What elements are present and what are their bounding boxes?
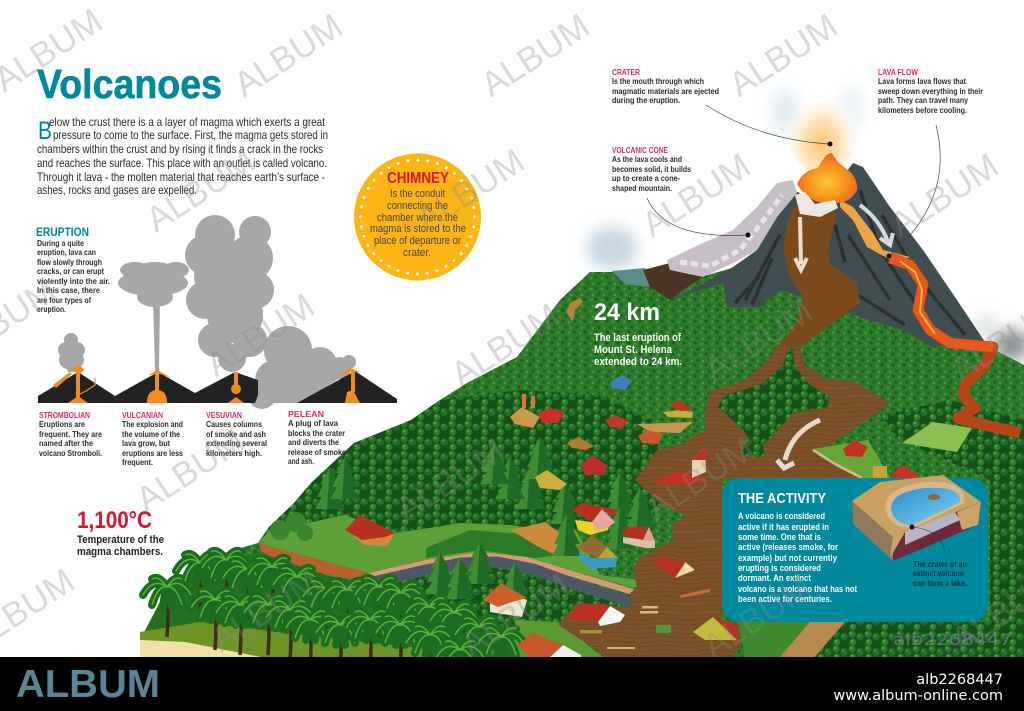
text block: introduction: [37, 115, 328, 197]
callout: chimney: Is the conduit: [390, 188, 445, 200]
panel text: volcano is a volcano that has not: [738, 584, 857, 594]
smoke: strombolian: [58, 333, 85, 372]
caption: extinct volcano: [913, 568, 964, 578]
footer logo: ALBUM: [16, 663, 160, 706]
text block: introduction: Through it lava - the molten material that reaches earth’s surface -: [37, 170, 325, 184]
label: volcanic cone: up to create a cone-: [612, 173, 680, 183]
label: lava flow: LAVA FLOW: [878, 67, 919, 77]
caption: can form a lake.: [913, 578, 967, 588]
village dirt path: [637, 422, 693, 433]
label: crater: [612, 67, 832, 146]
brown flow: [777, 207, 860, 347]
callout: chimney: chamber where the: [377, 212, 458, 224]
text block: vesuvian: [206, 410, 267, 458]
panel text: some time. One that is: [738, 532, 821, 542]
label: lava flow: path. They can travel many: [878, 95, 968, 105]
text block: vulcanian: The explosion and: [122, 419, 183, 429]
panel heading: THE ACTIVITY: [738, 490, 826, 507]
watermarks: ALBUM: [129, 421, 251, 520]
label: volcanic cone: becomes solid, it builds: [612, 164, 691, 174]
pale lava highlights: [680, 195, 782, 266]
yellow house by panel: [693, 617, 737, 640]
text block: vesuvian: extending several: [206, 438, 267, 448]
right forest: [810, 400, 1024, 657]
callout: temperature: Temperature of the: [77, 534, 164, 546]
white rim: [795, 192, 838, 217]
callout: 24 km: extended to 24 km.: [594, 356, 682, 368]
text block: pelean: [288, 409, 346, 466]
eroded bank: [258, 543, 370, 581]
watermarks: ALBUM: [697, 291, 819, 390]
chart: eruption types diagram: [38, 215, 397, 409]
flow arrows: [795, 217, 807, 270]
watermarks: ALBUM: [199, 286, 321, 385]
right bank edge: [813, 450, 862, 478]
label: volcanic cone: [612, 145, 750, 238]
yellow house: [572, 503, 618, 535]
callout: chimney: magma is stored to the: [370, 223, 466, 235]
cone ridges: [735, 190, 965, 335]
palm grove ground: [140, 552, 490, 657]
watermarks: ALBUM: [722, 6, 844, 105]
watermarks: ALBUM: [635, 146, 757, 245]
text block: strombolian: [39, 410, 102, 458]
label: crater: CRATER: [612, 67, 640, 77]
green lobe below panel: [738, 622, 810, 657]
lava conduits: [53, 365, 360, 403]
text block: vulcanian: frequent.: [122, 457, 153, 467]
panel text: A volcano is considered: [738, 511, 825, 521]
label: crater: during the eruption.: [612, 95, 680, 105]
callout: temperature: 1,100°C: [77, 507, 152, 534]
text block: eruption: [36, 225, 110, 314]
watermarks: ALBUM: [639, 429, 761, 528]
callout: 24 km: [594, 299, 682, 368]
text block: pelean: blocks the crater: [288, 428, 346, 438]
label: lava flow: [878, 67, 984, 258]
lagoon: [612, 268, 650, 287]
callout: 24 km: 24 km: [594, 299, 660, 326]
beach: [140, 640, 261, 657]
callout: temperature: magma chambers.: [77, 546, 163, 558]
caption: [913, 559, 967, 588]
text block: introduction: and reaches the surface. This place with an outlet is called volcano.: [37, 156, 327, 170]
caption: The crater of an: [913, 559, 967, 569]
label: volcanic cone: As the lava cools and: [612, 154, 682, 164]
text block: pelean: A plug of lava: [288, 418, 338, 428]
text block: eruption: ERUPTION: [36, 225, 89, 239]
label: volcanic cone: VOLCANIC CONE: [612, 145, 668, 155]
text block: eruption: In this case, there: [37, 285, 100, 295]
pale lava flow: [840, 200, 910, 263]
text block: pelean: and ash.: [288, 456, 314, 466]
text block: eruption: are four types of: [37, 295, 91, 305]
text block: introduction: chambers within the crust and by rising it finds a crack in the rocks: [37, 142, 323, 156]
text block: vesuvian: Causes columns: [206, 419, 262, 429]
text block: pelean: release of smoke: [288, 447, 346, 457]
text block: eruption: eruption, lava can: [37, 247, 96, 257]
callout: chimney: place of departure or: [374, 235, 461, 247]
callout: chimney: crater.: [403, 247, 431, 259]
text block: introduction: B: [38, 117, 52, 145]
forest island: [718, 345, 830, 458]
tree bunch: [270, 512, 313, 541]
text block: introduction: ashes, rocks and gases are expelled.: [37, 183, 197, 197]
text block: eruption: During a quite: [37, 238, 84, 248]
lower woods: [369, 567, 633, 657]
red lava stream: [890, 258, 1020, 433]
blue house: [577, 535, 618, 569]
watermarks: ALBUM: [454, 566, 576, 665]
forest hedge: [426, 530, 560, 558]
text block: strombolian: STROMBOLIAN: [39, 410, 90, 420]
text block: introduction: elow the crust there is a a layer of magma which exerts a great: [49, 115, 326, 129]
watermarks: ALBUM: [139, 141, 261, 240]
text block: vesuvian: kilometers high.: [206, 448, 262, 458]
illustration: houses: [345, 298, 920, 657]
dark cone: [670, 163, 985, 347]
callout: chimney: [354, 154, 481, 280]
panel text: erupting is considered: [738, 563, 821, 573]
mud debris: [580, 589, 710, 649]
watermarks: ALBUM: [204, 561, 326, 660]
base flow: [643, 263, 703, 300]
panel text: example) but not currently: [738, 553, 837, 563]
red white house: [568, 603, 625, 626]
grass by lower houses: [515, 620, 603, 657]
text block: vulcanian: eruptions are less: [122, 448, 183, 458]
text block: vulcanian: the volume of the: [122, 429, 180, 439]
smoke: vesuvian: [185, 215, 274, 372]
illustration: volcano: [643, 77, 1020, 433]
smoke: pelean: [248, 326, 356, 409]
olive undergrowth: [140, 622, 445, 657]
illustration: palm grove: [143, 551, 525, 700]
watermarks: ALBUM: [474, 6, 596, 105]
callout: 24 km: Mount St. Helena: [594, 344, 673, 356]
text block: vesuvian: VESUVIAN: [206, 410, 242, 420]
icon: crater lake block: [852, 475, 981, 561]
footer id: alb2268447: [916, 672, 1003, 688]
panel text: active (releases smoke, for: [738, 542, 838, 552]
pale lava field: [667, 180, 797, 277]
panel text: [738, 511, 857, 604]
text block: introduction: pressure to come to the surface. First, the magma gets stored in: [53, 128, 328, 142]
watermark id: alb2268447: [893, 630, 1012, 649]
bottom house: [517, 633, 581, 657]
callout: 24 km: The last eruption of: [594, 332, 681, 344]
text block: eruption: violently into the air.: [37, 276, 110, 286]
label: lava flow: kilometers before cooling.: [878, 105, 967, 115]
text block: vesuvian: of smoke and ash: [206, 429, 266, 439]
watermarks: ALBUM: [696, 568, 818, 667]
dirt path below panel: [780, 622, 845, 657]
light green field: [902, 422, 972, 452]
panel: the activity: [722, 475, 988, 622]
callout: chimney: connecting the: [387, 200, 448, 212]
smoke: vulcanian: [118, 262, 189, 372]
label: lava flow: Lava forms lava flows that: [878, 76, 966, 86]
text block: vulcanian: lava grow, but: [122, 438, 170, 448]
panel text: active if it has erupted in: [738, 522, 829, 532]
volcano silhouettes: [38, 371, 397, 403]
pink house: [622, 527, 655, 548]
house on mud: [653, 556, 695, 578]
label: volcanic cone: shaped mountain.: [612, 183, 672, 193]
big white flow arrow: [777, 420, 820, 468]
footer bar: [0, 657, 1024, 711]
orange house: [345, 515, 395, 546]
text block: strombolian: named after the: [39, 438, 93, 448]
text block: strombolian: frequent. They are: [39, 429, 102, 439]
watermarks: ALBUM: [227, 6, 349, 105]
illustration: mountain landscape: [140, 260, 1024, 657]
text block: vulcanian: [122, 410, 183, 467]
text block: eruption: eruption.: [37, 304, 66, 314]
strombolian branches: [78, 378, 95, 395]
illustration: trees: [315, 437, 655, 604]
dark forest band: [258, 390, 660, 543]
label: lava flow: sweep down everything in their: [878, 86, 984, 96]
label: crater: magmatic materials are ejected: [612, 86, 719, 96]
wrecked church: [653, 447, 708, 485]
road: [369, 555, 633, 603]
mountain slope: [140, 260, 1024, 657]
text block: strombolian: volcano Stromboli.: [39, 448, 102, 458]
text block: eruption: cracks, or can erupt: [37, 266, 104, 276]
mud flows: [558, 330, 890, 657]
text block: pelean: PELEAN: [288, 409, 324, 419]
footer url: www.album-online.com: [833, 688, 1003, 704]
text block: strombolian: Eruptions are: [39, 419, 85, 429]
right bank grass: [813, 440, 890, 478]
clearing around houses: [258, 515, 640, 588]
eruption glow: [784, 77, 860, 173]
orange path: [511, 522, 560, 555]
watermarks: ALBUM: [409, 141, 531, 240]
panel text: dormant. An extinct: [738, 573, 811, 583]
upper village: [510, 394, 565, 428]
text block: pelean: and diverts the: [288, 437, 339, 447]
text block: vulcanian: VULCANIAN: [122, 410, 163, 420]
callout: chimney: CHIMNEY: [387, 170, 450, 187]
panel text: been active for centuries.: [738, 594, 832, 604]
text block: intro title: Volcanoes: [37, 61, 222, 107]
watermarks: ALBUM: [883, 146, 1005, 245]
callout: temperature: [77, 507, 164, 558]
label: crater: Is the mouth through which: [612, 76, 704, 86]
fire: [797, 153, 857, 203]
text block: eruption: flow slowly through: [37, 257, 102, 267]
watermarks: ALBUM: [389, 431, 511, 530]
illustration: smoke behind volcano: [586, 86, 1024, 361]
watermarks: ALBUM: [444, 296, 566, 395]
white house: [483, 583, 527, 617]
